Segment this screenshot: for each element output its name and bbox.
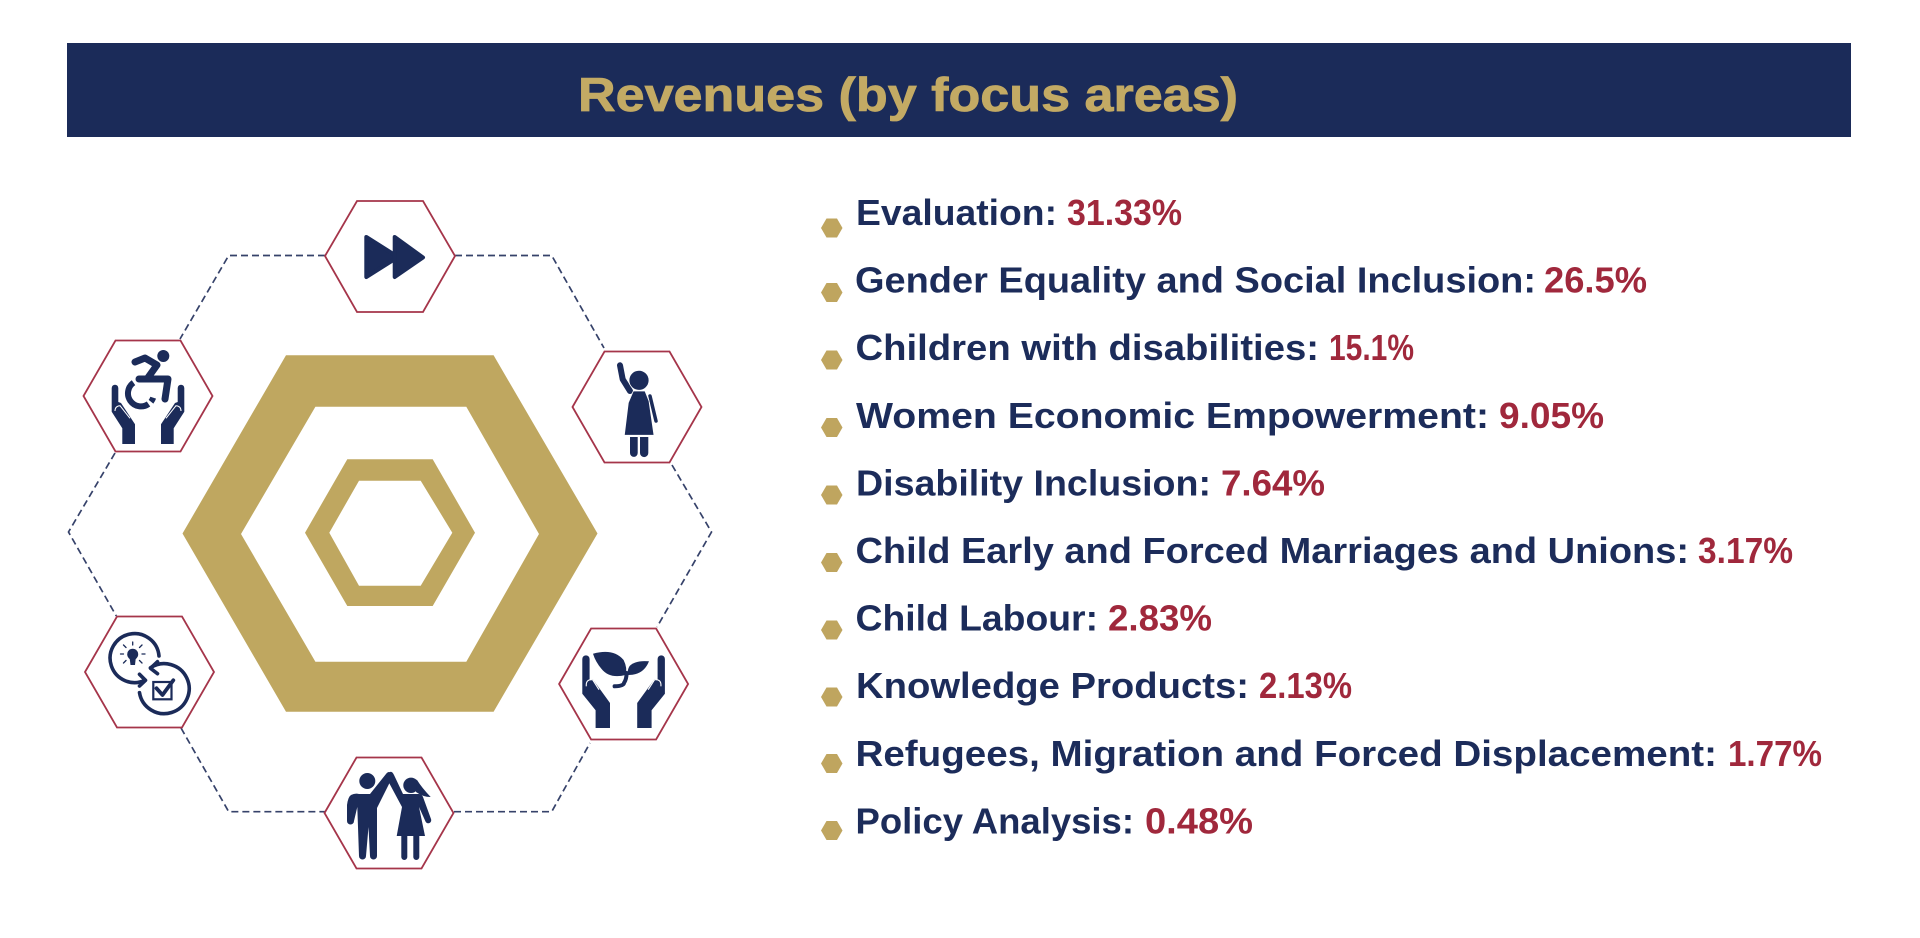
item: knowledge products: 2.13% [1259,665,1352,706]
item: disability inclusion: 7.64% [1221,462,1325,503]
icon: idea and check cycle [85,616,214,728]
item: refugees and migration: Refugees, Migration and Forced Displacement: [856,733,1717,774]
item: children with disabilities: Children with disabilities: [856,327,1319,368]
item: knowledge products: Knowledge Products: [856,665,1249,706]
item: disability inclusion [821,462,1325,504]
focus areas list [821,192,1822,841]
item: evaluation [821,192,1182,238]
item: child labour [821,598,1212,640]
item: policy analysis [821,800,1253,841]
icon: fast forward [325,201,455,312]
item: children with disabilities: 15.1% [1329,327,1414,368]
item: policy analysis: Policy Analysis: [856,800,1134,841]
icon: girl raising hand [572,352,702,462]
central gold hexagon [182,355,598,712]
item: knowledge products [821,665,1352,706]
item: child labour: 2.83% [1108,598,1212,639]
title banner [67,43,1851,137]
item: child early and forced marriages: Child Early and Forced Marriages and Unions: [856,530,1689,571]
item: child early and forced marriages: 3.17% [1698,530,1793,571]
dashed connector ring [68,256,712,812]
icon: wheelchair in hands [84,340,212,452]
item: child labour: Child Labour: [856,598,1098,639]
item: women economic empowerment: Women Economic Empowerment: [856,395,1489,436]
item: gender equality: 26.5% [1544,260,1647,301]
hexagon diagram [68,201,712,868]
item: evaluation: 31.33% [1067,192,1182,233]
item: gender equality: Gender Equality and Social Inclusion: [855,260,1536,301]
title: Revenues (by focus areas) [578,68,1238,121]
inner gold hexagon [305,459,475,606]
item: refugees and migration: 1.77% [1728,733,1822,774]
item: disability inclusion: Disability Inclusion: [856,462,1211,503]
item: evaluation: Evaluation: [856,192,1057,233]
item: policy analysis: 0.48% [1145,800,1253,841]
item: women economic empowerment: 9.05% [1499,395,1604,436]
icon: plant in hands [559,628,688,740]
icon: boy and girl high five [324,758,454,868]
